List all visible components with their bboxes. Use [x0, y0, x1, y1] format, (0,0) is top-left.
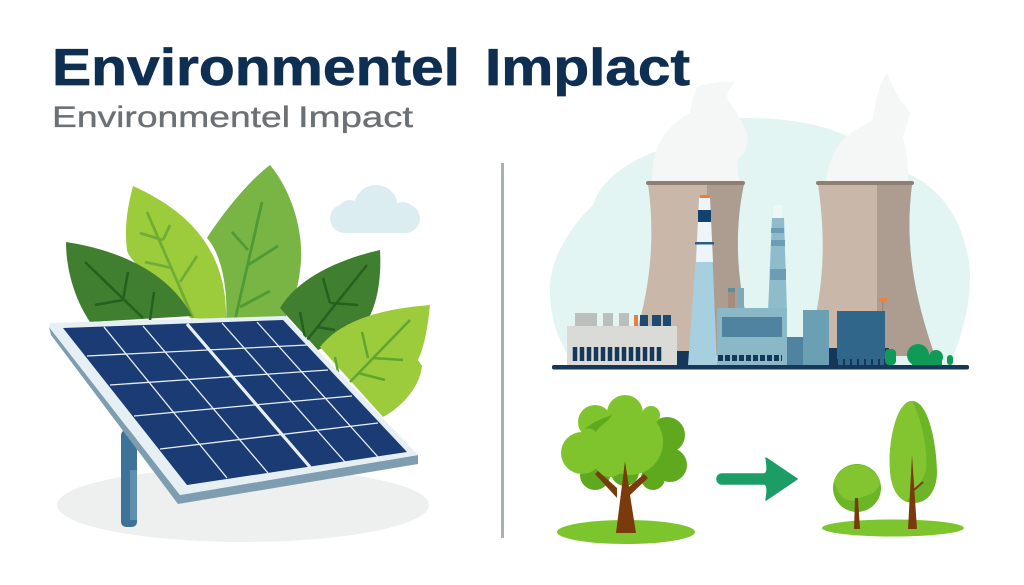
- arrow: [717, 458, 797, 500]
- large tree: [557, 395, 695, 544]
- title: Implact: [485, 39, 690, 97]
- smoke right: [826, 73, 910, 182]
- central building: [717, 308, 829, 365]
- striped chimney: [688, 195, 717, 365]
- subtitle: Impact: [298, 101, 414, 134]
- icon: solar panel: [49, 316, 418, 504]
- icon: panel pole: [121, 430, 137, 527]
- title: Environmentel: [52, 39, 460, 97]
- shrubs: [885, 344, 953, 366]
- icon: cloud: [330, 185, 420, 233]
- title: [52, 39, 690, 97]
- ground line: [552, 365, 969, 370]
- smoke left: [652, 82, 748, 182]
- left cooling tower: [628, 181, 758, 356]
- divider: [501, 163, 504, 538]
- ground shadow: [57, 468, 429, 542]
- icon: leaves: [66, 165, 430, 417]
- right cooling tower: [806, 181, 935, 356]
- navy block with flag: [829, 298, 889, 365]
- subtitle: [52, 101, 414, 134]
- solar illustration: [49, 165, 430, 542]
- gray building: [567, 313, 691, 366]
- subtitle: Environmentel: [52, 101, 290, 134]
- background blob: [550, 118, 970, 365]
- right chimney: [768, 205, 787, 312]
- power plant illustration: [550, 73, 970, 370]
- small trees: [822, 401, 964, 536]
- panel grid: [87, 322, 378, 478]
- small stacks: [728, 288, 744, 309]
